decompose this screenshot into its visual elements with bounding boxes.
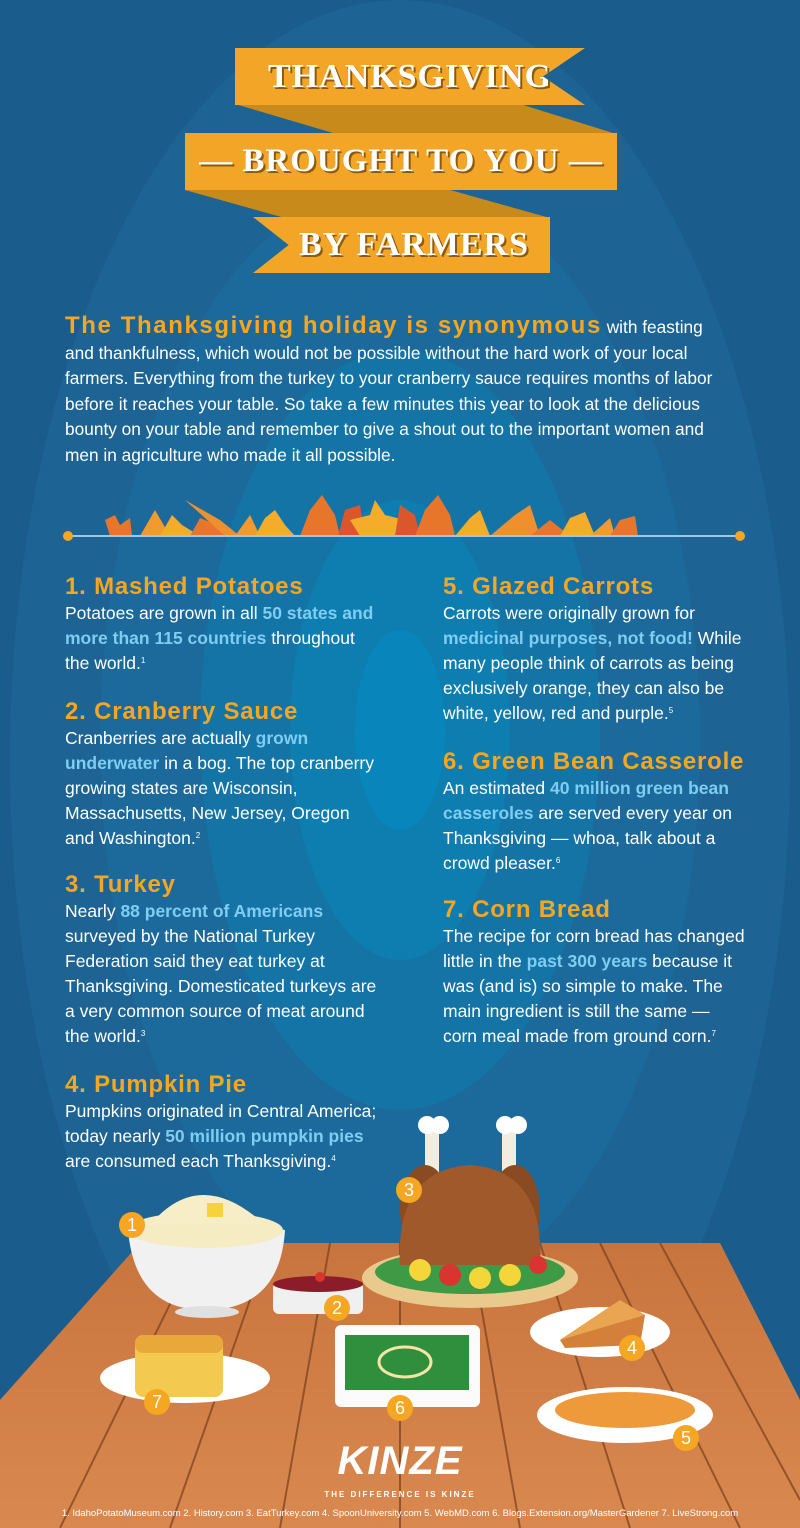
intro text: farmers. Everything from the turkey to your cranberry sauce requires months of labor [65,368,712,388]
intro text: before it reaches your table. So take a few minutes this year to look at the delicious [65,394,700,414]
intro text: men in agriculture who made it all possible. [65,444,395,464]
leaves divider [63,495,745,541]
logo: KINZE [338,1439,462,1483]
cranberry [273,1272,363,1314]
fact 1: more than 115 countries throughout [65,628,355,648]
corn bread [100,1335,270,1403]
intro text: and thankfulness, which would not be possible without the hard work of your local [65,342,688,362]
fact 2: underwater in a bog. The top cranberry [65,753,374,773]
ribbon 3 [253,217,550,273]
fact 5: exclusively orange, they can also be [443,678,724,698]
fact 2: growing states are Wisconsin, [65,778,297,798]
fact 2: 2. Cranberry Sauce [65,698,298,725]
ribbon 1: THANKSGIVING [268,58,552,95]
fact 6: Thanksgiving — whoa, talk about a [443,828,715,848]
fact 7: The recipe for corn bread has changed [443,926,745,946]
fact 3 [65,871,376,1046]
table with food [0,1116,800,1528]
fact 7: little in the past 300 years because it [443,951,732,971]
fact 2: and Washington.2 [65,828,200,848]
fact 3: 3. Turkey [65,871,176,898]
logo [324,1439,476,1499]
fact 5: white, yellow, red and purple.5 [443,703,673,723]
table with food: 7 [152,1392,162,1412]
fact 4: today nearly 50 million pumpkin pies [65,1126,364,1146]
table with food: 5 [681,1428,691,1448]
fact 2: Massachusetts, New Jersey, Oregon [65,803,350,823]
intro text: bounty on your table and remember to give a shout out to the important women and [65,419,704,439]
intro text: The Thanksgiving holiday is synonymous with feasting [65,312,703,339]
fact 1: 1. Mashed Potatoes [65,573,303,600]
ribbon 2: — BROUGHT TO YOU — [199,143,603,179]
table with food: 2 [332,1298,342,1318]
fact 3: Federation said they eat turkey at [65,951,325,971]
fact 7: 7. Corn Bread [443,896,611,923]
fact 6: crowd pleaser.6 [443,853,560,873]
fact 6: An estimated 40 million green bean [443,778,729,798]
fact 6 [443,748,744,873]
fact 3: a very common source of meat around [65,1001,365,1021]
pie [530,1300,670,1357]
fact 4: 4. Pumpkin Pie [65,1071,247,1098]
fact 1 [65,573,373,673]
fact 5: medicinal purposes, not food! While [443,628,742,648]
fact 4 [65,1071,376,1171]
table with food: 4 [627,1338,637,1358]
title banner [185,48,617,273]
mashed potatoes [127,1195,285,1318]
fact 5 [443,573,742,723]
intro text [65,312,712,464]
green bean casserole [335,1325,480,1407]
fact 5: 5. Glazed Carrots [443,573,654,600]
fact 1: Potatoes are grown in all 50 states and [65,603,373,623]
carrots [537,1387,713,1443]
fact 7: corn meal made from ground corn.7 [443,1026,716,1046]
fact 5: many people think of carrots as being [443,653,734,673]
table with food: 6 [395,1398,405,1418]
table [0,1243,800,1528]
fact 7: main ingredient is still the same — [443,1001,710,1021]
logo: THE DIFFERENCE IS KINZE [324,1490,476,1499]
fact 2: Cranberries are actually grown [65,728,308,748]
fact 3: the world.3 [65,1026,145,1046]
table with food: 1 [127,1215,137,1235]
fact 4: Pumpkins originated in Central America; [65,1101,376,1121]
ribbon 2 [185,133,617,190]
table with food: 3 [404,1180,414,1200]
turkey [362,1116,578,1308]
fact 5: Carrots were originally grown for [443,603,695,623]
fact 3: surveyed by the National Turkey [65,926,315,946]
fact 6: 6. Green Bean Casserole [443,748,744,775]
fact 6: casseroles are served every year on [443,803,732,823]
fact 7 [443,896,745,1046]
fact 3: Thanksgiving. Domesticated turkeys are [65,976,376,996]
fact 2 [65,698,374,848]
fact 4: are consumed each Thanksgiving.4 [65,1151,336,1171]
ribbon 3: BY FARMERS [299,226,529,263]
fact 7: was (and is) so simple to make. The [443,976,723,996]
fact 1: the world.1 [65,653,145,673]
sources footer: 1. IdahoPotatoMuseum.com 2. History.com 3. EatTurkey.com 4. SpoonUniversity.com 5. WebMD.com 6. Blogs.Extension.org/MasterGardener 7. LiveStrong.com [62,1508,738,1519]
number badges [119,1177,699,1451]
fact 3: Nearly 88 percent of Americans [65,901,323,921]
ribbon 1 [235,48,585,105]
